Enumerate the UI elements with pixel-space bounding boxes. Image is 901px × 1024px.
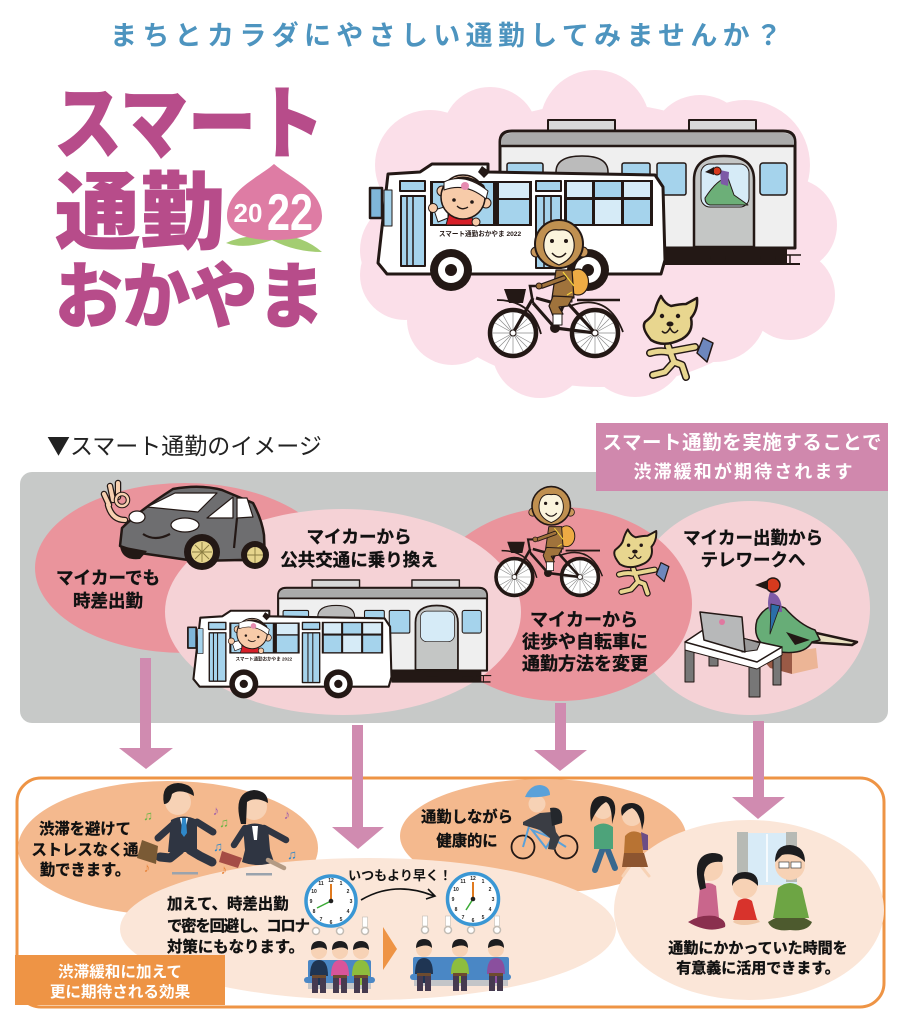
text: earlier than usual: いつもより早く！ — [348, 868, 452, 883]
pheasant in train window — [705, 167, 748, 205]
icon: clock 7 o'clock: 7 — [462, 915, 465, 921]
icon: pheasant at laptop — [685, 578, 857, 697]
logo text line 1: スマート — [54, 80, 324, 169]
text: healthy line 2: 健康的に — [436, 832, 498, 850]
icon: clock 8 o'clock: 4 — [347, 909, 350, 915]
music notes: ♫ — [287, 847, 297, 862]
music notes: ♫ — [143, 808, 153, 823]
icon: clock 7 o'clock: 9 — [452, 897, 455, 903]
peach 2022 badge: 22 — [267, 184, 313, 242]
label: staggered commute: マイカーでも — [56, 568, 160, 588]
text: use time: 通勤にかかっていた時間を — [668, 939, 848, 957]
label box: further effects: 渋滞緩和に加えて — [58, 963, 182, 981]
title: まちとカラダにやさしい通勤してみませんか？ — [110, 20, 782, 51]
peach 2022 badge: 20 — [234, 198, 262, 228]
icon: clock 7 o'clock: 3 — [492, 897, 495, 903]
bus — [370, 164, 665, 291]
ellipse: walk or bicycle — [428, 507, 692, 701]
text: avoid crowding line 3: 対策にもなります。 — [167, 937, 304, 956]
label box line 2: 更に期待される効果 — [50, 983, 191, 1001]
ellipse: healthy — [400, 779, 686, 893]
callout: expected congestion relief — [596, 423, 888, 491]
icon: clock 8 o'clock: 10 — [311, 889, 317, 895]
icon: crowded train seat — [304, 917, 375, 993]
logo text line 3: おかやま — [55, 258, 325, 338]
text: stress free line 3: 勤できます。 — [40, 861, 130, 879]
label: walk or bicycle line 3: 通勤方法を変更 — [522, 653, 648, 674]
icon: clock 7 o'clock: 12 — [470, 876, 476, 882]
callout line 2: 渋滞緩和が期待されます — [634, 461, 852, 482]
icon: clock 7 o'clock: 11 — [460, 879, 466, 885]
icon: walking women — [590, 796, 649, 876]
arrow: orange triangle — [383, 927, 397, 970]
arrow 2 — [332, 725, 384, 849]
text: avoid crowding: 加えて、時差出勤 — [167, 894, 289, 913]
icon: clock 8 o'clock: 9 — [310, 899, 313, 905]
text: avoid crowding line 2: で密を回避し、コロナ — [167, 917, 310, 935]
peach 2022 badge — [226, 164, 322, 252]
music notes: ♫ — [213, 839, 223, 854]
ellipse: use time — [614, 820, 884, 1000]
icon: clock 8 o'clock: 2 — [347, 889, 350, 895]
icon: uncrowded train seat — [410, 916, 511, 991]
music notes: ♪ — [144, 860, 150, 875]
panel: further expected effects — [15, 778, 884, 1007]
icon: commuters running — [137, 783, 297, 877]
icon: OK hand — [104, 483, 128, 520]
icon: family at home — [688, 832, 812, 930]
label: telework: マイカー出勤から — [683, 528, 823, 548]
ellipse: stress free — [18, 781, 318, 915]
ellipse: staggered commute — [35, 483, 335, 653]
dog small — [614, 529, 669, 593]
icon: clock 8 o'clock — [306, 876, 356, 926]
text: stress free line 2: ストレスなく通 — [31, 842, 139, 859]
icon: clock 8 o'clock: 12 — [328, 878, 334, 884]
hero illustration: cloud with vehicles — [360, 70, 837, 398]
bus small — [188, 611, 391, 698]
music notes: ♪ — [284, 807, 290, 822]
arrow 4 — [732, 721, 785, 819]
icon: clock 7 o'clock: 8 — [455, 907, 458, 913]
icon: clock 7 o'clock: 5 — [482, 915, 485, 921]
walking dog — [644, 296, 713, 377]
section heading: ▼スマート通勤のイメージ — [47, 427, 322, 461]
music notes: ♫ — [219, 815, 229, 830]
icon: clock 7 o'clock: 10 — [453, 887, 459, 893]
icon: clock 7 o'clock — [448, 874, 498, 924]
panel: smart commute image — [20, 472, 888, 723]
label: telework line 2: テレワークへ — [700, 550, 806, 570]
monkey on bicycle small — [496, 487, 602, 595]
arrow 1 — [119, 658, 173, 769]
music notes: ♪ — [221, 862, 227, 877]
arrow 3 — [534, 703, 587, 771]
music notes — [143, 803, 297, 877]
icon: clock 8 o'clock: 3 — [350, 899, 353, 905]
icon: clock 8 o'clock: 11 — [318, 881, 324, 887]
icon: clock 7 o'clock: 1 — [482, 879, 485, 885]
label: walk or bicycle: マイカーから — [530, 610, 638, 630]
icon: clock 8 o'clock: 5 — [340, 917, 343, 923]
label: public transport line 2: 公共交通に乗り換え — [280, 550, 438, 570]
text: healthy: 通勤しながら — [421, 808, 513, 826]
train — [500, 120, 801, 265]
icon: car — [104, 483, 269, 570]
label: staggered commute line 2: 時差出勤 — [73, 591, 143, 611]
logo — [54, 80, 325, 338]
ellipse: public transport — [165, 509, 521, 715]
icon: clock 7 o'clock: 6 — [472, 918, 475, 924]
monkey on bicycle — [490, 220, 623, 356]
icon: cyclist — [512, 785, 578, 858]
icon: clock 8 o'clock: 6 — [330, 920, 333, 926]
pink cloud — [360, 70, 837, 398]
arrow: clock to clock — [361, 889, 435, 900]
text: use time line 2: 有意義に活用できます。 — [676, 960, 840, 977]
text: stress free: 渋滞を避けて — [39, 820, 131, 838]
logo text line 2: 通勤 — [55, 166, 225, 260]
label: public transport: マイカーから — [306, 527, 412, 547]
ellipse: telework — [630, 501, 870, 715]
icon: clock 8 o'clock: 1 — [340, 881, 343, 887]
label box: further effects — [15, 955, 225, 1005]
train small — [278, 580, 491, 683]
icon: clock 7 o'clock: 2 — [489, 887, 492, 893]
icon: clock 7 o'clock: 4 — [489, 907, 492, 913]
label: walk or bicycle line 2: 徒歩や自転車に — [522, 632, 648, 652]
music notes: ♪ — [213, 803, 219, 818]
ellipse: avoid crowding — [120, 858, 616, 1000]
icon: clock 8 o'clock: 8 — [313, 909, 316, 915]
callout: expected congestion relief: スマート通勤を実施することで — [602, 432, 882, 454]
icon: clock 8 o'clock: 7 — [320, 917, 323, 923]
